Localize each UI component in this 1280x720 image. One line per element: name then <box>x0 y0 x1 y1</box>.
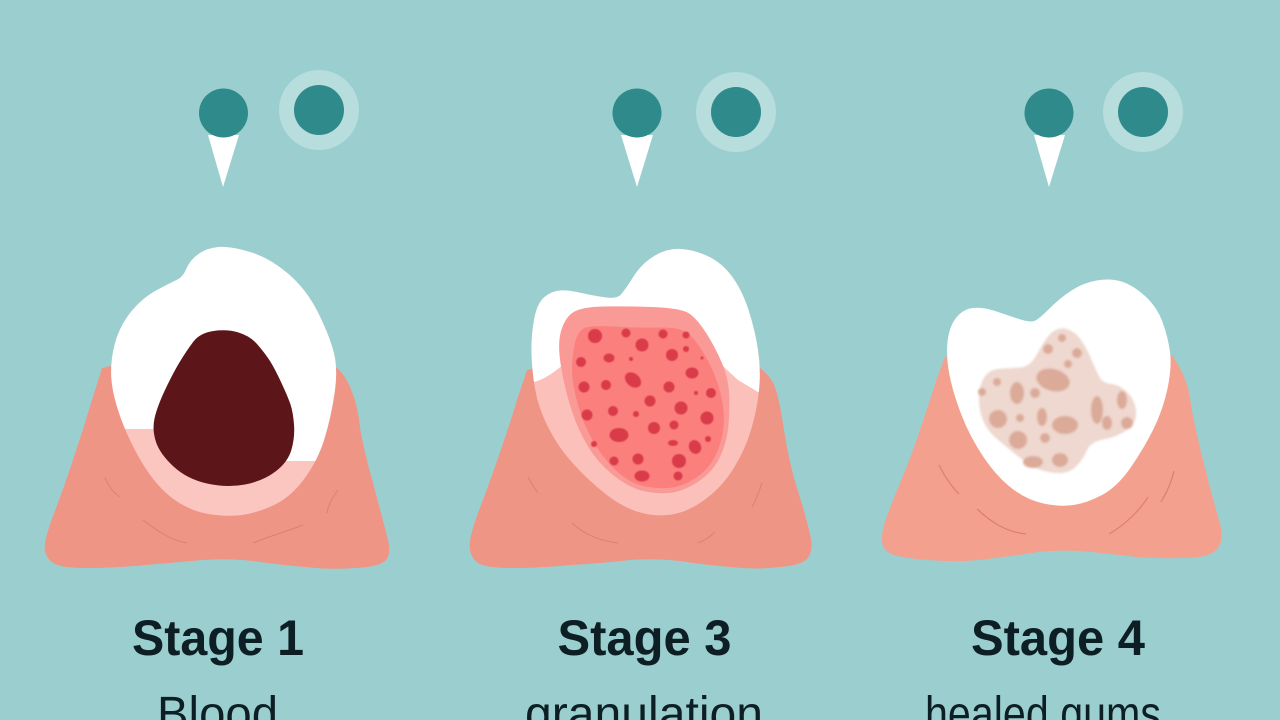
icon: pin marker stage 4 <box>1024 88 1074 187</box>
panel: stage 4 <box>882 72 1222 720</box>
illustration: bone regrowth patch <box>978 328 1136 473</box>
icon: ringed dot stage 3 <box>696 72 776 152</box>
icon: ringed dot stage 4 <box>1103 72 1183 152</box>
illustration: tooth socket stage 3 <box>531 248 760 516</box>
icon: ringed dot stage 1 <box>279 70 359 150</box>
heading: Stage 4: Stage 4 <box>971 610 1145 666</box>
illustration: gum stage 4 <box>882 330 1222 561</box>
illustration: blood clot <box>154 330 294 486</box>
heading: Stage 3: Stage 3 <box>558 610 732 666</box>
illustration: tooth socket stage 1 <box>111 246 336 516</box>
illustration: gum creases stage 4 <box>939 465 1174 534</box>
illustration: gum stage 3 <box>470 340 812 568</box>
heading: Stage 1: Stage 1 <box>132 610 304 666</box>
illustration: healed tooth socket <box>947 279 1171 506</box>
illustration: gum creases stage 1 <box>105 477 338 543</box>
illustration: gum creases stage 3 <box>528 477 762 543</box>
panel: stage 3 <box>470 72 812 720</box>
icon: pin marker stage 3 <box>612 88 662 187</box>
panel: stage 1 <box>45 70 389 720</box>
illustration: gum stage 1 <box>45 340 389 569</box>
illustration: granulation tissue <box>559 306 729 493</box>
illustration: bone pores <box>978 334 1133 468</box>
icon: pin marker stage 1 <box>199 88 248 187</box>
illustration: granulation spots <box>576 328 716 482</box>
